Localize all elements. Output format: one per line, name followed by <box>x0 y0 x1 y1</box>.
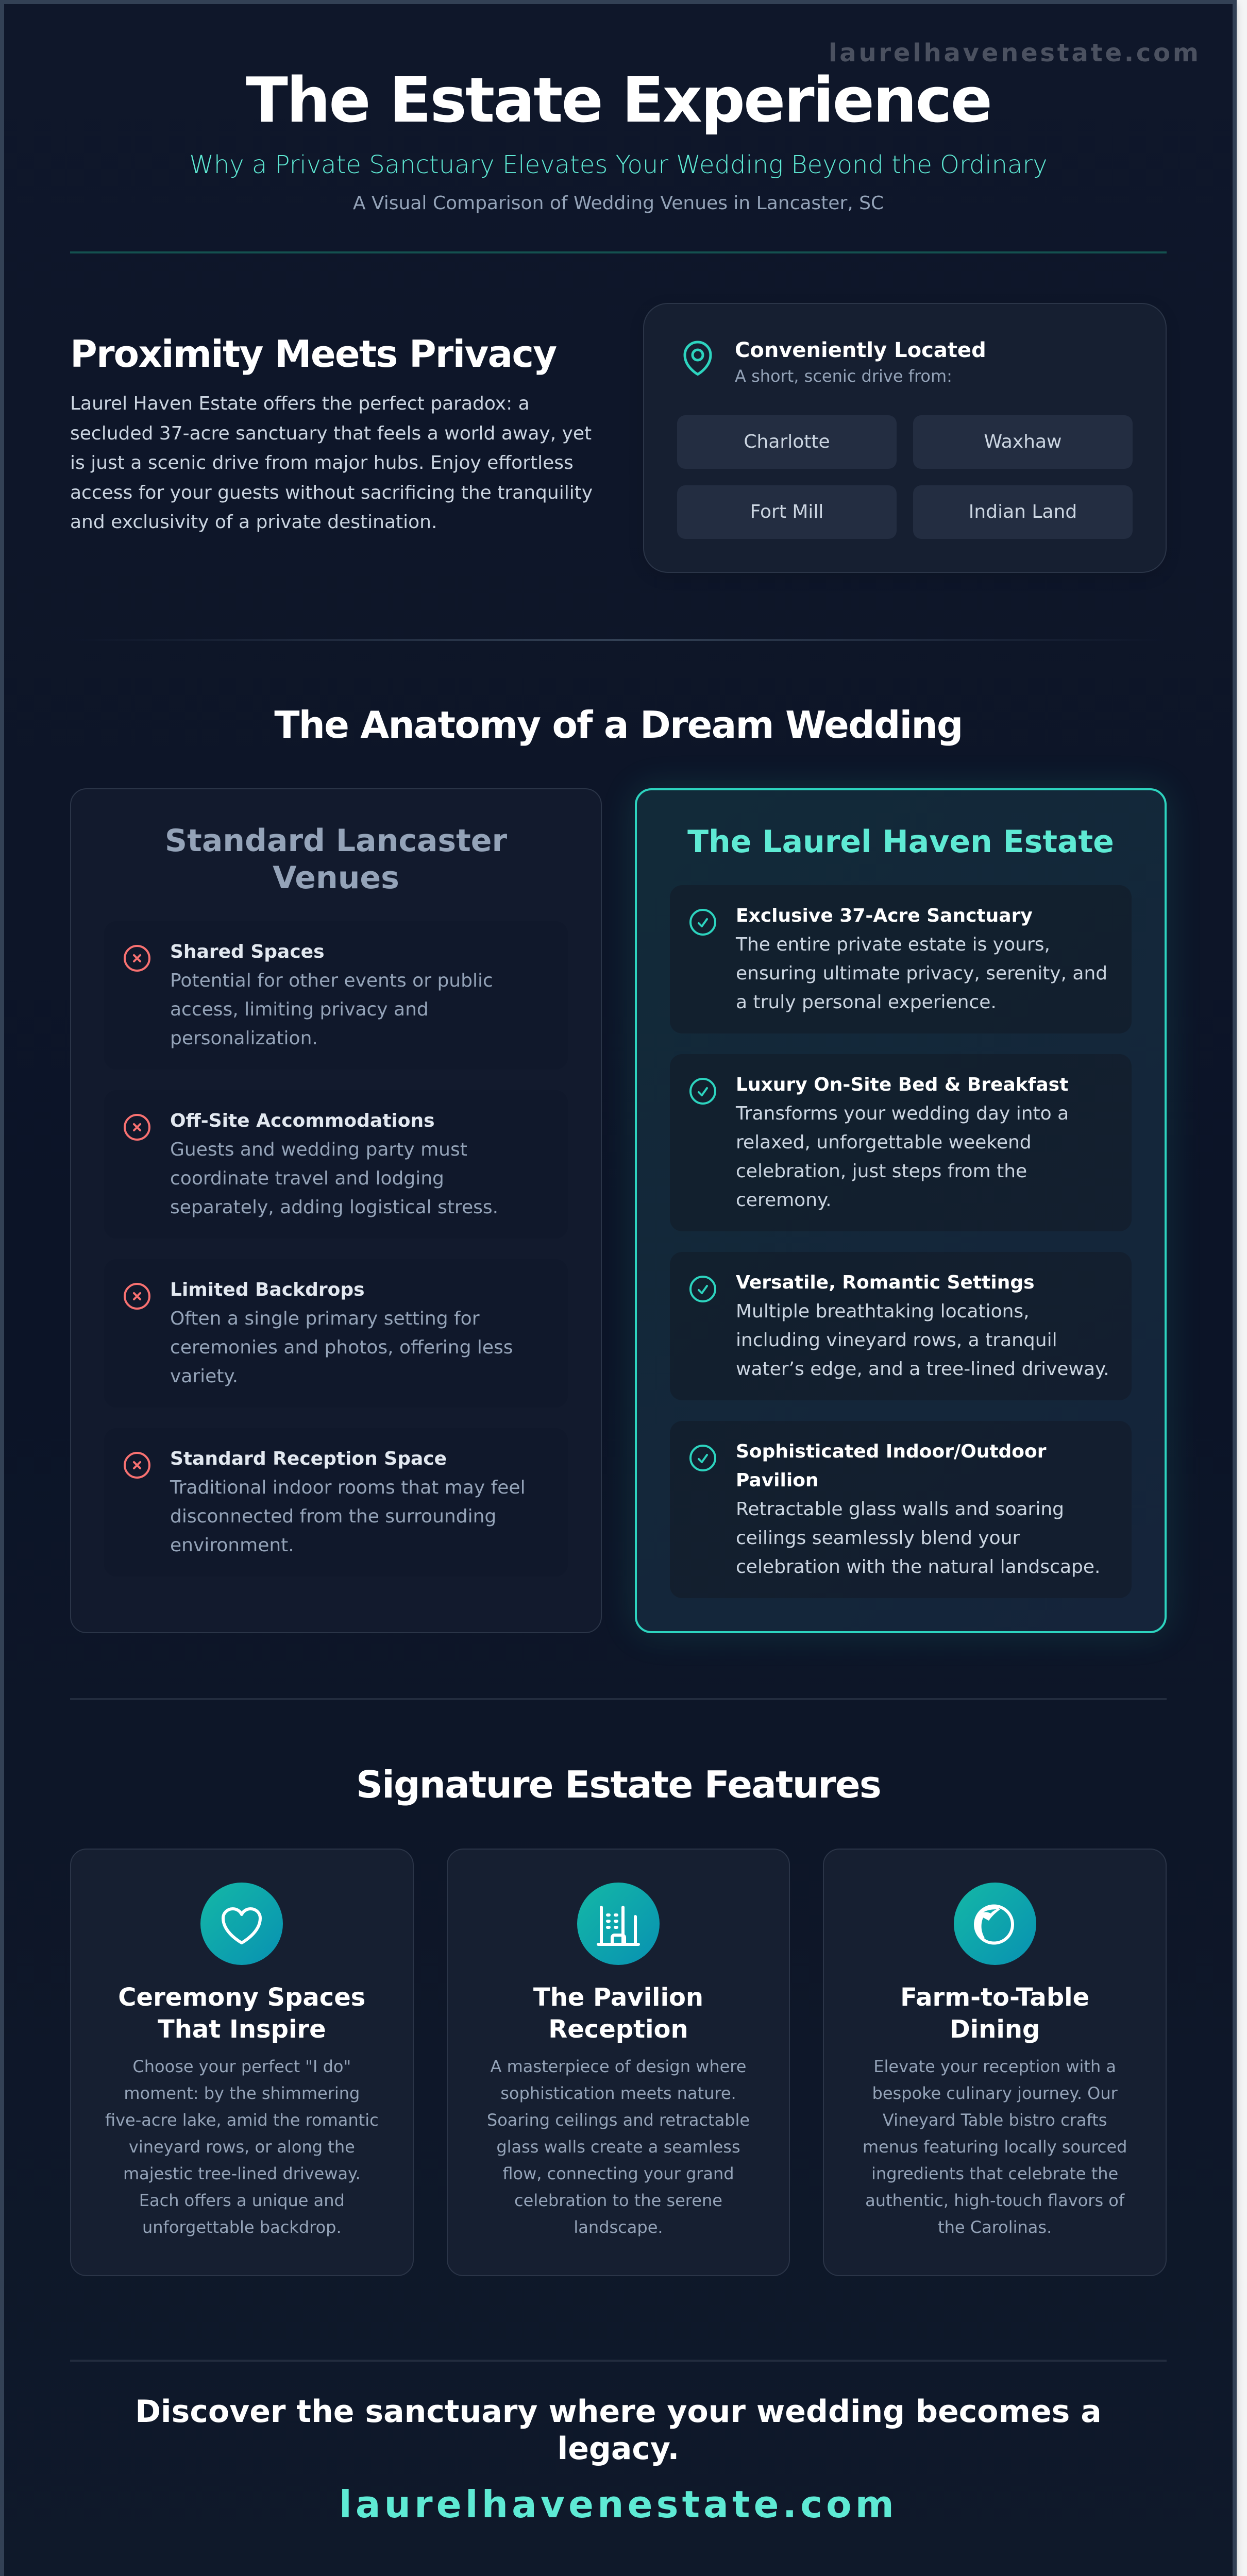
text: off-site accommodations <box>170 1110 498 1218</box>
heading: ceremony <box>118 1983 365 2044</box>
text: pavilion reception: glass walls create a seamless <box>496 2137 740 2157</box>
heading: conveniently located: Conveniently Located <box>735 338 986 362</box>
text: standard reception: Standard Reception Space <box>170 1448 447 1469</box>
text: standard reception <box>170 1448 526 1556</box>
item: pavilion <box>670 1421 1132 1598</box>
footer: tagline: legacy. <box>558 2431 679 2467</box>
location: Fort Mill: Fort Mill <box>750 501 823 522</box>
heading: laurel haven: The Laurel Haven Estate <box>687 824 1114 860</box>
icon: check circle <box>689 1445 716 1471</box>
text: ceremony: vineyard rows, or along the <box>129 2137 355 2157</box>
text: bed and breakfast: relaxed, unforgettable weekend <box>736 1132 1032 1153</box>
sub-subtitle: A Visual Comparison of Wedding Venues in Lancaster, SC <box>353 193 884 214</box>
text: versatile settings: including vineyard rows, a tranquil <box>736 1330 1057 1351</box>
text: shared spaces: Potential for other events or public <box>170 970 493 991</box>
heading: proximity: Proximity Meets Privacy <box>70 332 556 376</box>
text: proximity paragraph: Laurel Haven Estate offers the perfect paradox: a <box>70 393 530 414</box>
location: Charlotte: Charlotte <box>744 431 830 452</box>
footer: url: laurelhavenestate.com <box>339 2483 898 2526</box>
location: Indian Land <box>913 485 1133 539</box>
location: Waxhaw: Waxhaw <box>984 431 1061 452</box>
heading: ceremony: That Inspire <box>158 2015 326 2044</box>
text: pavilion: Sophisticated Indoor/Outdoor <box>736 1441 1047 1462</box>
text: proximity paragraph: secluded 37-acre sanctuary that feels a world away, yet <box>70 423 592 444</box>
panel: conveniently located <box>643 303 1167 573</box>
text: pavilion reception <box>448 2053 789 2241</box>
text: pavilion: Retractable glass walls and soaring <box>736 1499 1064 1520</box>
item: bed and breakfast <box>670 1054 1132 1231</box>
text: ceremony: five-acre lake, amid the romantic <box>105 2110 379 2130</box>
text: proximity paragraph: is just a scenic drive from major hubs. Enjoy effortless <box>70 452 574 473</box>
icon: x circle <box>124 1283 150 1310</box>
text: bed and breakfast: celebration, just steps from the <box>736 1161 1027 1182</box>
icon: check circle <box>689 1078 716 1105</box>
text: proximity paragraph: and exclusivity of a private destination. <box>70 512 437 533</box>
text: ceremony: moment: by the shimmering <box>124 2083 360 2103</box>
text: bed and breakfast <box>736 1074 1069 1211</box>
text: pavilion reception: sophistication meets nature. <box>500 2083 736 2103</box>
text: exclusive sanctuary: ensuring ultimate privacy, serenity, and <box>736 963 1107 984</box>
text: limited backdrops: variety. <box>170 1366 238 1387</box>
text: bed and breakfast: ceremony. <box>736 1190 832 1211</box>
text: exclusive sanctuary: a truly personal experience. <box>736 992 997 1013</box>
item: exclusive sanctuary <box>670 885 1132 1033</box>
text: exclusive sanctuary: Exclusive 37-Acre Sanctuary <box>736 905 1033 926</box>
text: pavilion: celebration with the natural landscape. <box>736 1556 1100 1578</box>
text: pavilion reception: A masterpiece of design where <box>491 2057 746 2076</box>
text: exclusive sanctuary: The entire private estate is yours, <box>736 934 1050 955</box>
text: farm to table <box>824 2053 1166 2241</box>
text: shared spaces <box>170 941 493 1049</box>
icon: x circle <box>124 1452 150 1479</box>
icon: check circle <box>689 909 716 936</box>
text: farm to table: Elevate your reception with a <box>873 2057 1116 2076</box>
text: pavilion reception: Soaring ceilings and retractable <box>487 2110 750 2130</box>
text: limited backdrops <box>170 1279 513 1387</box>
text: farm to table: menus featuring locally sourced <box>863 2137 1127 2157</box>
item: versatile settings <box>670 1252 1132 1400</box>
icon: building <box>577 1883 660 1965</box>
item: standard reception <box>104 1428 568 1577</box>
text: ceremony: unforgettable backdrop. <box>142 2217 342 2237</box>
text: off-site accommodations: coordinate travel and lodging <box>170 1168 444 1189</box>
text: versatile settings: water’s edge, and a tree-lined driveway. <box>736 1359 1109 1380</box>
text: farm to table: bespoke culinary journey. Our <box>872 2083 1118 2103</box>
text: exclusive sanctuary <box>736 905 1107 1013</box>
icon: globe plate <box>954 1883 1036 1965</box>
text: standard reception: disconnected from the surrounding <box>170 1506 496 1527</box>
icon: map pin <box>683 341 712 376</box>
text: limited backdrops: Often a single primary setting for <box>170 1308 480 1329</box>
text: ceremony <box>105 2057 379 2237</box>
feature card: dining <box>823 1849 1167 2276</box>
text: shared spaces: access, limiting privacy and <box>170 999 429 1020</box>
text: pavilion: Pavilion <box>736 1470 819 1491</box>
heading: standard venues: Venues <box>273 860 399 896</box>
text: standard reception: Traditional indoor rooms that may feel <box>170 1477 526 1498</box>
item: off-site accommodations <box>104 1090 568 1239</box>
icon: heart <box>200 1883 283 1965</box>
text: ceremony: Choose your perfect "I do" <box>132 2057 351 2076</box>
text: ceremony: Each offers a unique and <box>139 2191 345 2210</box>
heading: pavilion reception: The Pavilion <box>533 1983 703 2012</box>
title: The Estate Experience <box>246 65 991 137</box>
feature card: ceremony <box>70 1849 414 2276</box>
heading: farm to table <box>824 1981 1166 2046</box>
text: bed and breakfast: Luxury On-Site Bed & Breakfast <box>736 1074 1068 1095</box>
heading: standard venues: Standard Lancaster <box>165 823 507 859</box>
heading: anatomy: The Anatomy of a Dream Wedding <box>274 703 963 747</box>
text: farm to table: the Carolinas. <box>938 2217 1052 2237</box>
heading: farm to table: Farm-to-Table <box>900 1983 1089 2012</box>
heading: farm to table: Dining <box>950 2015 1040 2044</box>
heading: pavilion reception <box>448 1981 789 2046</box>
text: limited backdrops: ceremonies and photos, offering less <box>170 1337 513 1358</box>
icon: x circle <box>124 1114 150 1141</box>
text: off-site accommodations: separately, adding logistical stress. <box>170 1197 498 1218</box>
footer: tagline: Discover the sanctuary where your wedding becomes a <box>135 2394 1102 2430</box>
watermark: laurelhavenestate.com <box>829 39 1201 67</box>
panel: standard venues <box>70 788 602 1633</box>
text: pavilion <box>736 1441 1100 1578</box>
icon: check circle <box>689 1276 716 1302</box>
text: versatile settings: Multiple breathtaking locations, <box>736 1301 1030 1322</box>
text: short drive: A short, scenic drive from: <box>735 366 952 386</box>
text: bed and breakfast: Transforms your wedding day into a <box>736 1103 1069 1124</box>
location: Fort Mill <box>677 485 897 539</box>
text: proximity paragraph: access for your guests without sacrificing the tranquility <box>70 482 593 503</box>
text: off-site accommodations: Off-Site Accommodations <box>170 1110 435 1131</box>
panel: laurel haven <box>635 788 1167 1633</box>
text: proximity paragraph <box>70 393 593 533</box>
location: Waxhaw <box>913 415 1133 469</box>
text: standard reception: environment. <box>170 1535 294 1556</box>
heading: standard venues <box>165 823 507 896</box>
text: farm to table: ingredients that celebrate the <box>871 2164 1118 2183</box>
icon: x circle <box>124 945 150 972</box>
subtitle: Why a Private Sanctuary Elevates Your Wedding Beyond the Ordinary <box>189 150 1048 179</box>
text: shared spaces: Shared Spaces <box>170 941 325 962</box>
location: Charlotte <box>677 415 897 469</box>
text: versatile settings <box>736 1272 1109 1380</box>
feature card: pavilion <box>447 1849 790 2276</box>
location: Indian Land: Indian Land <box>969 501 1077 522</box>
text: off-site accommodations: Guests and wedding party must <box>170 1139 467 1160</box>
item: shared spaces <box>104 921 568 1070</box>
text: farm to table: authentic, high-touch flavors of <box>865 2191 1124 2210</box>
text: farm to table: Vineyard Table bistro crafts <box>883 2110 1107 2130</box>
text: pavilion: ceilings seamlessly blend your <box>736 1528 1020 1549</box>
footer: tagline <box>0 2393 1237 2467</box>
text: shared spaces: personalization. <box>170 1028 318 1049</box>
text: ceremony: majestic tree-lined driveway. <box>123 2164 361 2183</box>
item: limited backdrops <box>104 1259 568 1408</box>
text: versatile settings: Versatile, Romantic Settings <box>736 1272 1035 1293</box>
heading: ceremony: Ceremony Spaces <box>118 1983 365 2012</box>
text: pavilion reception: landscape. <box>574 2217 663 2237</box>
text: limited backdrops: Limited Backdrops <box>170 1279 365 1300</box>
text: pavilion reception: flow, connecting your grand <box>502 2164 734 2183</box>
text: pavilion reception: celebration to the serene <box>514 2191 722 2210</box>
heading: signature features: Signature Estate Features <box>356 1763 881 1806</box>
heading: pavilion reception: Reception <box>548 2015 688 2044</box>
